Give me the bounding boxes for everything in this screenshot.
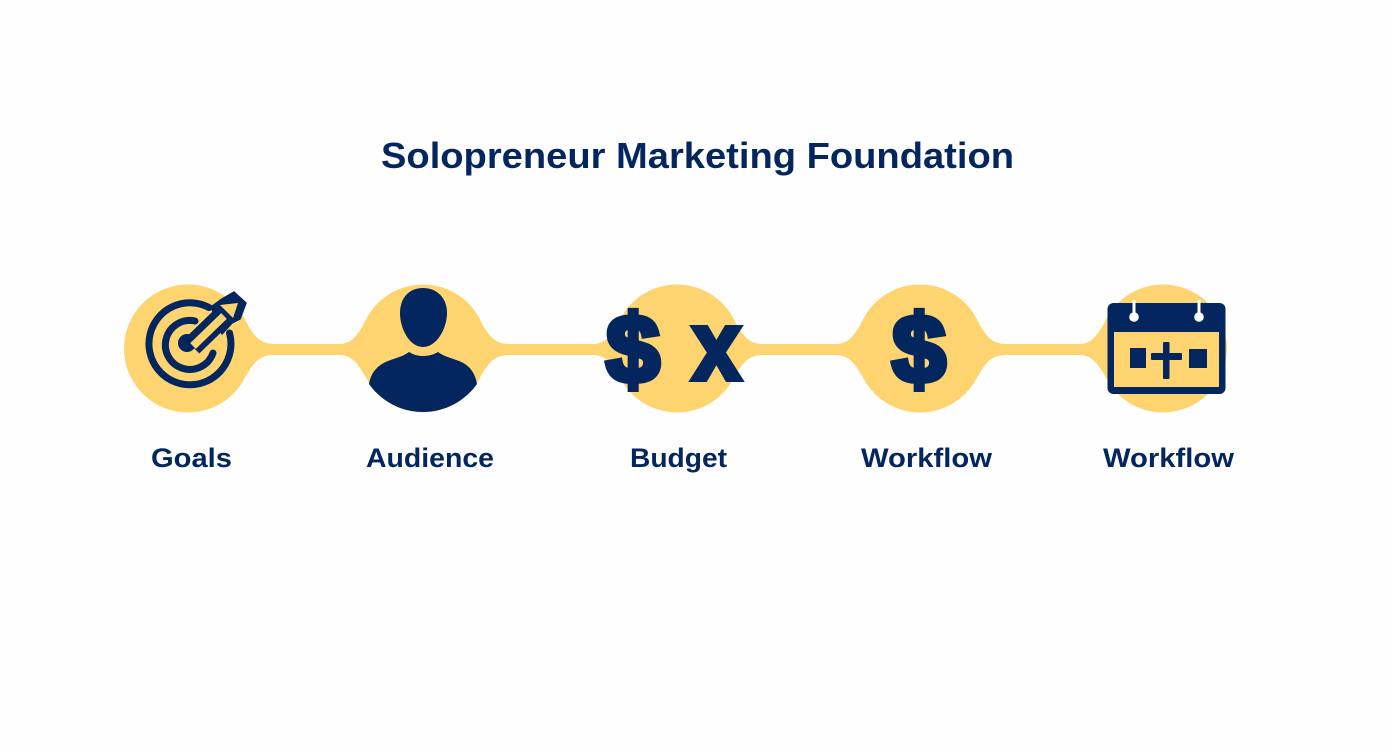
step: audience (359, 284, 494, 473)
workflow circle (1099, 284, 1227, 412)
budget label: Budget (630, 443, 727, 473)
step: workflow one (856, 284, 993, 473)
icon: person (369, 288, 477, 412)
step: budget (606, 284, 741, 473)
step: workflow two (1099, 284, 1235, 473)
title: Solopreneur Marketing Foundation (381, 135, 1014, 176)
connectors between steps (246, 322, 1105, 376)
icon: dollar and x: x (692, 291, 741, 401)
workflow label: Workflow (1103, 443, 1235, 473)
icon: target with arrow (149, 292, 246, 385)
step: goals (124, 284, 252, 473)
icon: calendar (1108, 300, 1226, 394)
workflow label: Workflow (861, 443, 993, 473)
goals label: Goals (151, 443, 232, 473)
audience circle (359, 284, 487, 412)
icon: dollar and x (606, 291, 741, 403)
audience label: Audience (366, 443, 494, 473)
icon: dollar: $ (892, 296, 946, 403)
icon: dollar and x: $ (606, 296, 660, 403)
budget circle (613, 284, 741, 412)
goals circle (124, 284, 252, 412)
workflow circle (856, 284, 984, 412)
